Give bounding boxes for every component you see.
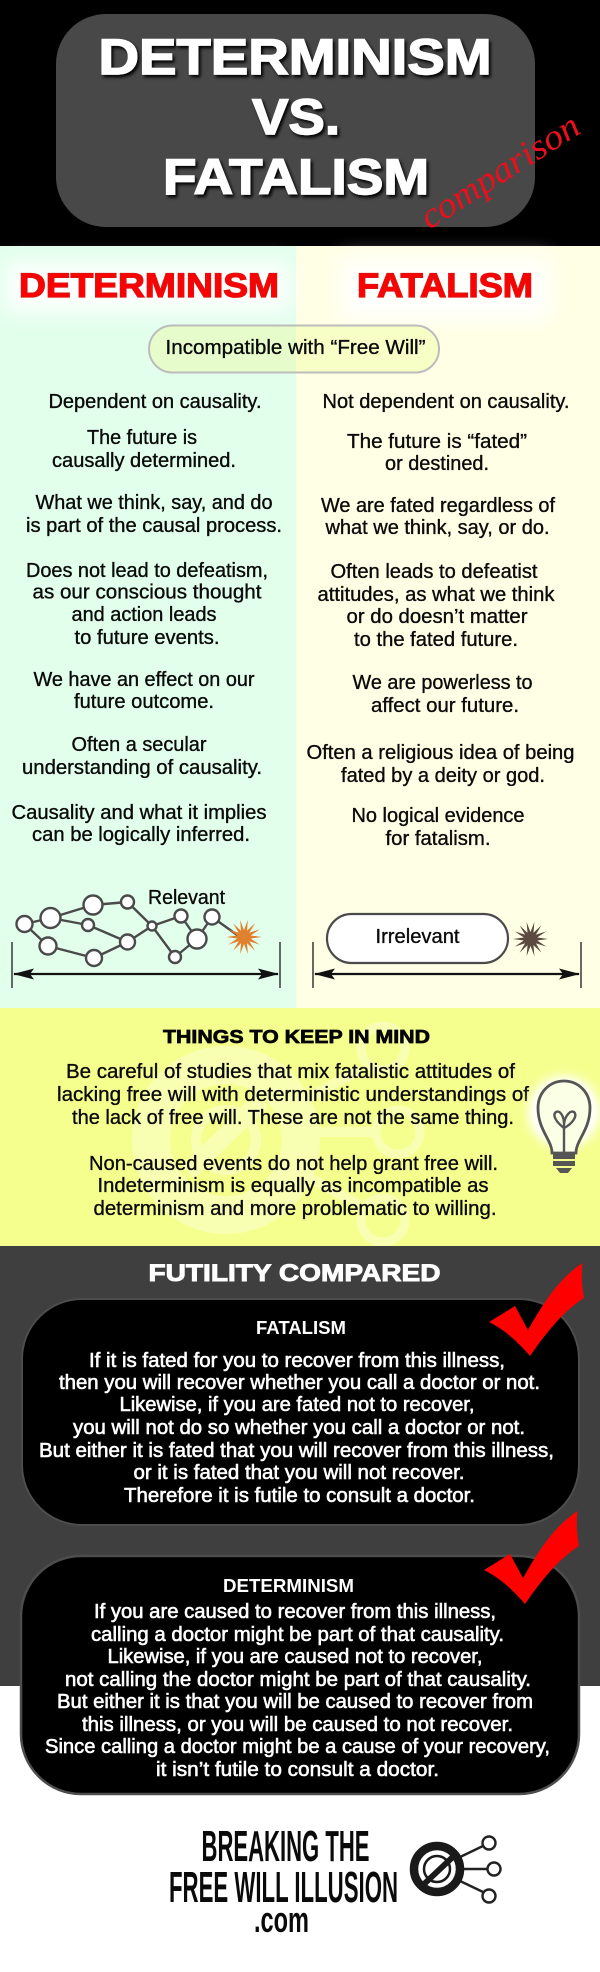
panel: fatalism argument: then you will recover whether you call a doctor or not. [59,1372,540,1394]
determinism column text: causally determined. [52,450,236,472]
panel: fatalism argument: Likewise, if you are fated not to recover, [120,1394,474,1416]
icon: red check mark 1 [489,1263,584,1356]
panel: determinism argument: it isn’t futile to consult a doctor. [156,1759,439,1781]
text block: keep in mind notes: Indeterminism is equally as incompatible as [98,1175,488,1197]
determinism column text: is part of the causal process. [26,515,282,537]
panel: determinism argument: Likewise, if you are caused not to recover, [108,1646,482,1668]
determinism column text: Does not lead to defeatism, [26,560,268,582]
determinism column text: We have an effect on our [34,669,255,691]
panel: determinism argument: DETERMINISM [223,1576,354,1596]
icon: orange star [226,919,262,955]
determinism column text: Often a secular [72,734,207,756]
panel: fatalism argument: Therefore it is futile to consult a doctor. [124,1485,475,1507]
brand wordmark: BREAKING THE [202,1822,370,1871]
fatalism column text: to the fated future. [354,629,518,651]
text block: keep in mind notes [57,1061,529,1220]
icon: brand logo [414,1836,500,1902]
title: DETERMINISM [98,29,491,85]
icon: dark star [513,921,548,957]
arrow: left span [12,942,280,988]
determinism column text [12,391,282,846]
title panel [56,14,535,227]
determinism column text: to future events. [74,627,220,649]
fatalism column text [306,391,574,850]
panel: fatalism argument: or it is fated that you will not recover. [134,1462,464,1484]
heading: futility compared: FUTILITY COMPARED [148,1260,440,1287]
determinism column text: future outcome. [74,691,214,713]
fatalism column text: what we think, say, or do. [325,517,550,539]
fatalism column text: The future is “fated” [347,431,527,453]
label: relevant: Relevant [148,887,225,909]
panel: determinism argument: this illness, or you will be caused to not recover. [82,1714,513,1736]
pill: irrelevant: Irrelevant [376,926,460,948]
panel: determinism argument [21,1556,579,1794]
panel: determinism argument: calling a doctor might be part of that causality. [91,1624,504,1646]
heading: fatalism: FATALISM [357,267,533,305]
text block: keep in mind notes: Non-caused events do not help grant free will. [89,1153,498,1175]
header band [0,0,600,246]
fatalism column text: fated by a deity or god. [341,765,545,787]
panel: things to keep in mind [0,1008,600,1246]
title: VS. [252,89,340,145]
determinism column text: understanding of causality. [22,757,262,779]
panel: determinism argument: But either it is that you will be caused to recover from [57,1691,533,1713]
fatalism column text: or destined. [385,453,489,475]
fatalism column text: attitudes, as what we think [318,584,556,606]
handwritten note: comparison: comparison [412,105,587,237]
icon: light bulb [528,1076,600,1173]
fatalism column text: or do doesn’t matter [346,606,528,628]
panel: determinism argument: Since calling a doctor might be a cause of your recovery, [45,1736,550,1758]
panel: determinism argument: not calling the doctor might be part of that causality. [65,1669,531,1691]
title [98,29,491,205]
fatalism column text: Not dependent on causality. [322,391,570,413]
panel: fatalism argument: FATALISM [256,1318,346,1338]
fatalism column text: We are powerless to [352,672,532,694]
panel: determinism argument: If you are caused to recover from this illness, [94,1601,496,1623]
fatalism column text: Often leads to defeatist [330,561,538,583]
heading: determinism: DETERMINISM [19,267,279,305]
text block: keep in mind notes: lacking free will with deterministic understandings of [57,1084,529,1106]
panel: fatalism argument: If it is fated for you to recover from this illness, [89,1350,505,1372]
arrow: right span [313,942,581,988]
panel: fatalism argument: But either it is fated that you will recover from this illness, [39,1440,554,1462]
diagram: relevant causal network [16,887,240,966]
determinism column text: Dependent on causality. [48,391,262,413]
fatalism column text: No logical evidence [352,805,524,827]
panel: fatalism argument [22,1299,579,1525]
determinism column text: Causality and what it implies [12,802,266,824]
icon: red check mark 2 [484,1511,579,1604]
panel: futility compared background [0,1246,600,1686]
fatalism column text: for fatalism. [386,828,490,850]
title: FATALISM [163,149,429,205]
text block: keep in mind notes: the lack of free will. These are not the same thing. [72,1107,514,1129]
brand wordmark [169,1822,398,1940]
determinism column text: as our conscious thought [32,582,262,604]
comparison column backgrounds [0,246,600,1008]
shared pill: incompatible with free will: Incompatible with “Free Will” [166,337,426,359]
brand wordmark: .com [254,1899,309,1940]
determinism column text: can be logically inferred. [32,824,250,846]
determinism column text: The future is [87,427,197,449]
fatalism column text: affect our future. [371,695,519,717]
fatalism column text: We are fated regardless of [321,495,555,517]
determinism column text: and action leads [72,604,216,626]
fatalism column text: Often a religious idea of being [306,742,574,764]
shared pill: incompatible with free will [149,326,439,372]
panel: fatalism argument: you will not do so whether you call a doctor or not. [73,1417,525,1439]
pill: irrelevant [327,914,508,963]
text block: keep in mind notes: Be careful of studies that mix fatalistic attitudes of [66,1061,515,1083]
text block: keep in mind notes: determinism and more problematic to willing. [94,1198,496,1220]
determinism column text: What we think, say, and do [36,492,272,514]
heading: things to keep in mind: THINGS TO KEEP IN MIND [163,1027,430,1047]
